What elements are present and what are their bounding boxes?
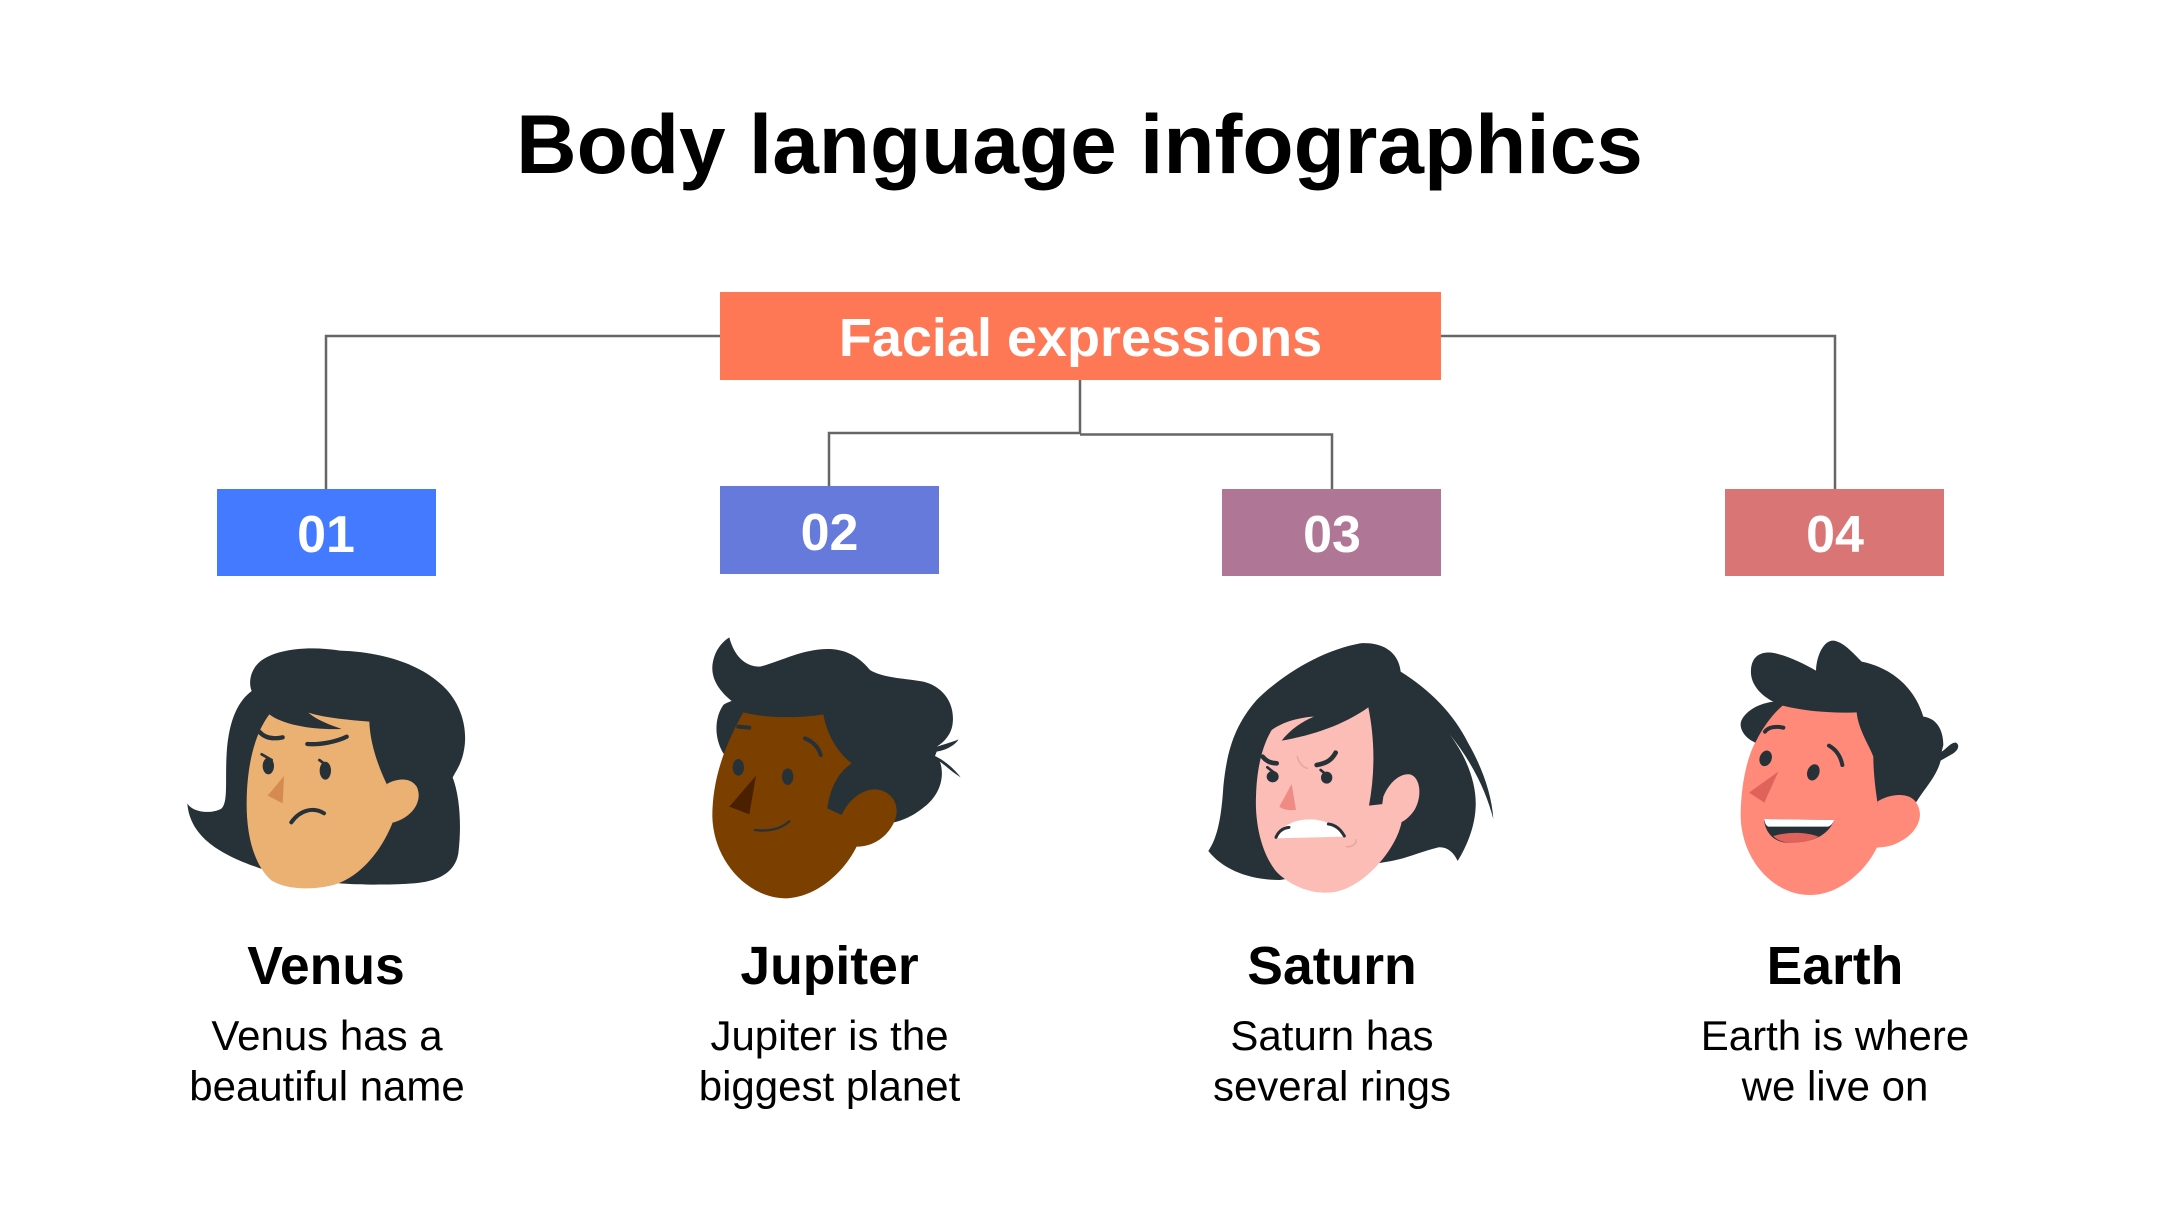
connector lines xyxy=(326,336,1835,489)
heading box: Facial expressions: Facial expressions xyxy=(839,308,1322,368)
heading box: Facial expressions xyxy=(720,292,1441,380)
number box 03 xyxy=(1222,489,1441,576)
number box 02: 02 xyxy=(801,504,858,562)
icon: angry face xyxy=(1208,643,1493,893)
column text: Saturn xyxy=(1213,937,1451,1110)
column text: Venus xyxy=(189,937,465,1110)
column text: Jupiter: biggest planet xyxy=(699,1062,961,1110)
column text: Earth: Earth is where xyxy=(1701,1012,1969,1059)
column text: Jupiter: Jupiter is the xyxy=(710,1012,949,1059)
column text: Venus: Venus xyxy=(247,937,405,996)
column text: Saturn: Saturn xyxy=(1247,937,1417,996)
number box 03: 03 xyxy=(1303,506,1361,564)
column text: Venus: beautiful name xyxy=(189,1062,465,1110)
icon: worried face xyxy=(187,648,465,888)
column text: Earth xyxy=(1701,937,1969,1110)
column text: Jupiter: Jupiter xyxy=(740,937,919,996)
column text: Venus: Venus has a xyxy=(211,1012,443,1059)
column text: Saturn: Saturn has xyxy=(1230,1012,1434,1059)
column text: Earth: Earth xyxy=(1767,937,1903,996)
column text: Earth: we live on xyxy=(1741,1062,1928,1110)
column text: Saturn: several rings xyxy=(1213,1062,1451,1110)
number box 01: 01 xyxy=(297,506,355,564)
icon: content face xyxy=(712,637,961,898)
icon: happy face xyxy=(1741,641,1958,895)
number box 02 xyxy=(720,486,939,574)
title: Body language infographics xyxy=(516,97,1643,191)
number box 04 xyxy=(1725,489,1944,576)
column text: Jupiter xyxy=(699,937,961,1110)
number box 04: 04 xyxy=(1806,506,1864,564)
number box 01 xyxy=(217,489,436,576)
